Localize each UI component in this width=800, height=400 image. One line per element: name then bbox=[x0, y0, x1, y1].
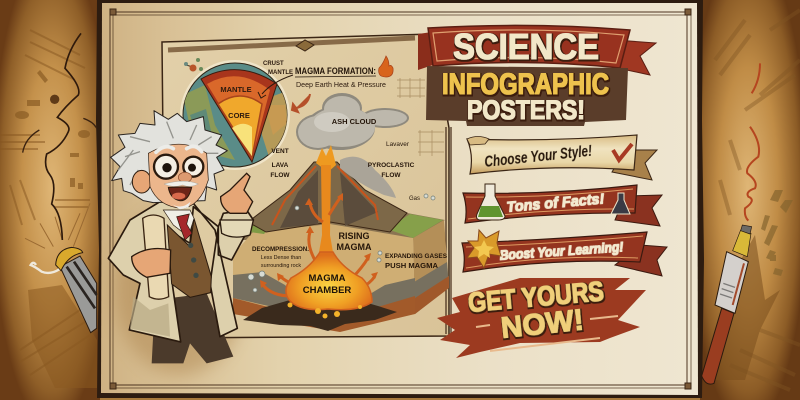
title: posters: POSTERS! bbox=[467, 95, 585, 125]
small grid sketch bbox=[397, 78, 444, 156]
eyebrows bbox=[156, 146, 202, 152]
label: magma chamber: MAGMA bbox=[309, 273, 345, 284]
banner body bbox=[467, 135, 637, 174]
banner text: Tons of Facts! bbox=[506, 191, 605, 216]
banner body bbox=[463, 185, 637, 223]
icon: burst star bbox=[467, 230, 501, 268]
heading: magma formation: MAGMA FORMATION: bbox=[295, 66, 376, 77]
banner: boost your learning bbox=[462, 230, 667, 276]
bubbles bbox=[248, 194, 435, 292]
panel corner squares bbox=[110, 9, 691, 389]
sheet ornament bbox=[296, 40, 314, 51]
label: lava flow: FLOW bbox=[270, 172, 290, 179]
marker pen bbox=[702, 63, 760, 384]
goatee bbox=[172, 202, 191, 209]
banner inset bbox=[466, 236, 643, 268]
banner curl bbox=[467, 136, 489, 145]
label: expanding gases: EXPANDING GASES bbox=[385, 253, 448, 260]
icon: small flask bbox=[611, 193, 630, 214]
lava side flows bbox=[272, 166, 378, 225]
rolled scroll bbox=[143, 215, 169, 299]
block right face bbox=[413, 220, 449, 314]
pyroclastic flow bbox=[340, 157, 396, 198]
title: infographic: INFOGRAPHIC bbox=[442, 68, 609, 101]
banner text: Boost Your Learning! bbox=[499, 238, 624, 263]
label: decompression: DECOMPRESSION. bbox=[252, 246, 309, 253]
magma chamber bbox=[286, 252, 372, 310]
label: ash cloud: ASH CLOUD bbox=[332, 117, 377, 126]
label: pyroclastic flow: PYROCLASTIC bbox=[368, 162, 414, 169]
brush strokes left bbox=[0, 30, 90, 375]
wand body bbox=[60, 256, 97, 333]
sheet paper bbox=[162, 34, 449, 338]
call to action: get yours now bbox=[437, 275, 646, 358]
wand stripes bbox=[67, 262, 97, 308]
volcano block bbox=[232, 93, 449, 332]
pointing hand bbox=[221, 173, 253, 213]
ribbon body bbox=[428, 25, 630, 68]
banner: tons of facts bbox=[463, 184, 662, 226]
spark lines bbox=[25, 203, 90, 248]
label: crust: CRUST bbox=[263, 61, 284, 67]
wand curled wire bbox=[31, 263, 59, 273]
panel inner double rule bbox=[110, 12, 691, 388]
title: science: SCIENCE bbox=[453, 26, 599, 67]
volcano labels bbox=[252, 117, 448, 296]
marker shadow bbox=[710, 235, 780, 380]
banner tail bbox=[615, 245, 667, 276]
red brush stroke bbox=[437, 278, 646, 358]
scientist character bbox=[108, 111, 253, 363]
panel dark edge bbox=[96, 0, 704, 398]
label: outer mantle: MANTLE bbox=[268, 70, 293, 76]
label: less dense: surrounding rock bbox=[261, 263, 301, 269]
dark roots bbox=[243, 298, 397, 331]
label: lava flow: LAVA bbox=[272, 162, 288, 169]
text: get yours: GET YOURS bbox=[467, 275, 605, 318]
label: core: CORE bbox=[228, 111, 250, 120]
sheet right rule bbox=[446, 127, 451, 336]
ribbon tail right bbox=[608, 40, 656, 75]
block top surface bbox=[232, 190, 445, 252]
wooden background left bbox=[0, 0, 100, 400]
vest buttons bbox=[188, 243, 199, 278]
nose bbox=[178, 172, 192, 182]
pen nib bbox=[741, 225, 752, 234]
red tie bbox=[177, 214, 192, 240]
star centre bbox=[474, 240, 494, 258]
holding hand bbox=[132, 248, 171, 277]
label: rising magma: RISING bbox=[338, 231, 370, 241]
central conduit bbox=[318, 165, 334, 258]
core wedge bbox=[218, 96, 262, 158]
brush patches right bbox=[761, 190, 793, 276]
lab coat bbox=[108, 202, 253, 342]
globe cutaway bbox=[180, 60, 293, 170]
label: less dense: Less Dense than bbox=[261, 255, 301, 261]
magic wand bbox=[23, 33, 97, 333]
title ribbon: science bbox=[418, 25, 656, 75]
pen red stripe bbox=[733, 263, 744, 305]
title block: infographic posters bbox=[426, 66, 628, 126]
small crescent bbox=[50, 95, 59, 104]
red ink squiggle bbox=[745, 63, 760, 221]
open mouth bbox=[168, 187, 192, 201]
banner text: Choose Your Style! bbox=[484, 143, 593, 171]
ear bbox=[132, 170, 151, 193]
banner: choose your style bbox=[467, 135, 657, 180]
brush highlight strokes bbox=[476, 316, 618, 351]
block front face bbox=[233, 224, 415, 330]
trousers bbox=[152, 293, 233, 363]
text: now: NOW! bbox=[499, 303, 585, 345]
face bbox=[148, 144, 208, 208]
icon: red check mark bbox=[613, 144, 632, 160]
label: gas: Gas bbox=[409, 196, 420, 202]
earth wedge bbox=[201, 70, 277, 162]
pen grip lines bbox=[720, 283, 735, 298]
vest bbox=[167, 218, 211, 297]
sheet ornamental band bbox=[168, 38, 415, 50]
hair shading bbox=[118, 122, 218, 185]
label: layer: Lavaver bbox=[386, 142, 409, 148]
icon: flame bbox=[379, 56, 393, 77]
ash plume bbox=[296, 93, 409, 150]
banner inset bbox=[466, 189, 634, 219]
curved arrow bbox=[292, 94, 310, 112]
pen silver clip bbox=[715, 252, 748, 313]
label: mantle: MANTLE bbox=[220, 85, 252, 94]
label: push magma: PUSH MAGMA bbox=[385, 263, 438, 270]
dark brush patch bbox=[426, 66, 628, 126]
brush patches left bbox=[15, 70, 90, 189]
grass patches bbox=[250, 220, 272, 234]
arrow heads bbox=[260, 193, 378, 288]
side smoke arcs bbox=[23, 118, 97, 153]
parchment panel bbox=[96, 0, 704, 398]
ribbon tail left bbox=[418, 32, 436, 70]
icon: green flask bbox=[476, 184, 505, 220]
label: magma chamber: CHAMBER bbox=[303, 285, 351, 296]
wooden background right bbox=[700, 0, 800, 400]
label: pyroclastic flow: FLOW bbox=[381, 172, 401, 179]
wand gold cap bbox=[56, 247, 83, 271]
pen yellow section bbox=[733, 230, 751, 257]
banner tail bbox=[612, 150, 657, 180]
volcano cone bbox=[248, 162, 407, 232]
diagram sheet bbox=[162, 34, 451, 338]
ribbon inset bbox=[433, 30, 624, 63]
pointer arrow bbox=[258, 75, 293, 98]
banner body bbox=[462, 232, 647, 272]
heading: magma formation: Deep Earth Heat & Pressure bbox=[296, 80, 386, 89]
land masses bbox=[183, 85, 235, 160]
smoke line bbox=[46, 33, 81, 240]
label: rising magma: MAGMA bbox=[336, 242, 372, 252]
warm shadow behind scientist bbox=[115, 205, 245, 375]
shirt collar bbox=[163, 210, 194, 237]
brush strokes right bbox=[715, 10, 800, 390]
heading: magma formation bbox=[295, 66, 386, 89]
wild white hair bbox=[111, 111, 227, 203]
coat shadow bbox=[130, 297, 170, 337]
coat cuff bbox=[220, 220, 253, 237]
moustache bbox=[164, 181, 198, 186]
shadow under wand bbox=[28, 285, 97, 388]
banner tail bbox=[615, 195, 662, 226]
pen barrel bbox=[702, 308, 734, 384]
glasses and eyes bbox=[154, 155, 203, 179]
label: vent: VENT bbox=[271, 148, 289, 155]
molecule icon bbox=[184, 58, 203, 72]
eruption bbox=[316, 145, 336, 172]
panel paper bbox=[101, 3, 698, 395]
magma branch arrows bbox=[263, 198, 375, 296]
glowing embers bbox=[288, 302, 362, 318]
